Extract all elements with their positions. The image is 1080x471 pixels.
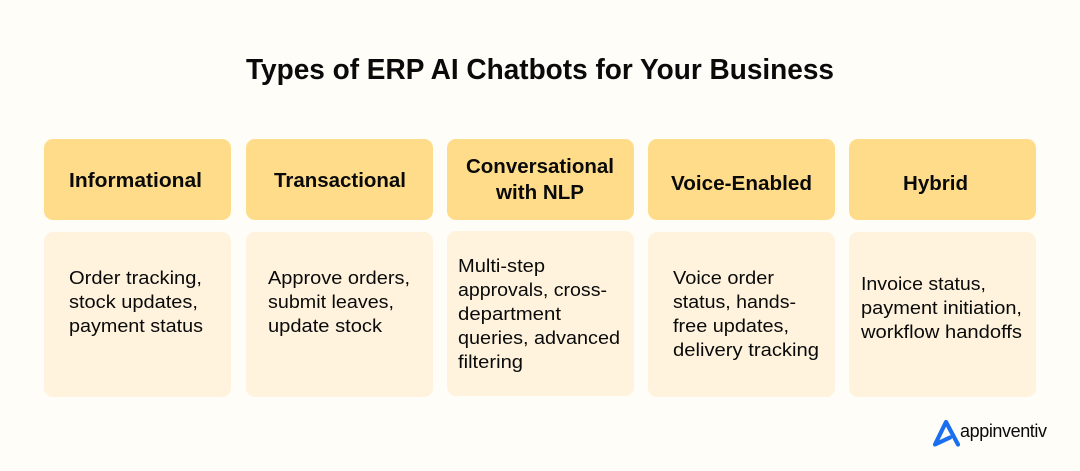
body card: Informational bbox=[44, 232, 231, 397]
title: Types of ERP AI Chatbots for Your Business bbox=[246, 54, 834, 86]
body card: Conversational with NLP: department bbox=[458, 303, 561, 324]
logo: appinventiv bbox=[935, 421, 1047, 444]
body card: Conversational with NLP: approvals, cross- bbox=[458, 279, 607, 300]
body card: Informational: Order tracking, bbox=[69, 267, 202, 288]
panel: Hybrid bbox=[849, 139, 1036, 397]
header card: Informational: Informational bbox=[69, 169, 202, 192]
body card: Informational: payment status bbox=[69, 315, 203, 336]
header card: Hybrid bbox=[849, 139, 1036, 220]
panel: Informational bbox=[44, 139, 231, 397]
panel: Conversational with NLP bbox=[447, 139, 634, 396]
body card: Informational: stock updates, bbox=[69, 291, 198, 312]
header card: Conversational with NLP: with NLP bbox=[495, 181, 584, 204]
body card: Voice-Enabled bbox=[648, 232, 835, 397]
body card: Conversational with NLP bbox=[447, 231, 634, 396]
header card: Conversational with NLP bbox=[447, 139, 634, 220]
body card: Hybrid bbox=[849, 232, 1036, 397]
header card: Conversational with NLP: Conversational bbox=[466, 155, 614, 178]
header card: Informational bbox=[44, 139, 231, 220]
panel: Transactional bbox=[246, 139, 433, 397]
body card: Transactional: submit leaves, bbox=[268, 291, 394, 312]
body card: Transactional bbox=[246, 232, 433, 397]
body card: Hybrid: workflow handoffs bbox=[860, 321, 1022, 342]
body card: Conversational with NLP: filtering bbox=[458, 351, 523, 372]
body card: Voice-Enabled: free updates, bbox=[673, 315, 789, 336]
header card: Transactional: Transactional bbox=[274, 169, 406, 192]
body card: Transactional: update stock bbox=[268, 315, 383, 336]
body card: Conversational with NLP: Multi-step bbox=[458, 255, 545, 276]
header card: Voice-Enabled: Voice-Enabled bbox=[671, 172, 812, 195]
header card: Transactional bbox=[246, 139, 433, 220]
body card: Hybrid: payment initiation, bbox=[861, 297, 1022, 318]
body card: Conversational with NLP: queries, advanced bbox=[458, 327, 620, 348]
body card: Voice-Enabled: status, hands- bbox=[673, 291, 796, 312]
header card: Voice-Enabled bbox=[648, 139, 835, 220]
body card: Hybrid: Invoice status, bbox=[861, 273, 986, 294]
body card: Voice-Enabled: Voice order bbox=[673, 267, 774, 288]
body card: Voice-Enabled: delivery tracking bbox=[673, 339, 819, 360]
header card: Hybrid: Hybrid bbox=[903, 172, 968, 195]
body card: Transactional: Approve orders, bbox=[268, 267, 410, 288]
panel: Voice-Enabled bbox=[648, 139, 835, 397]
logo wordmark: appinventiv bbox=[960, 421, 1047, 441]
icon: blue A mark bbox=[935, 422, 958, 444]
